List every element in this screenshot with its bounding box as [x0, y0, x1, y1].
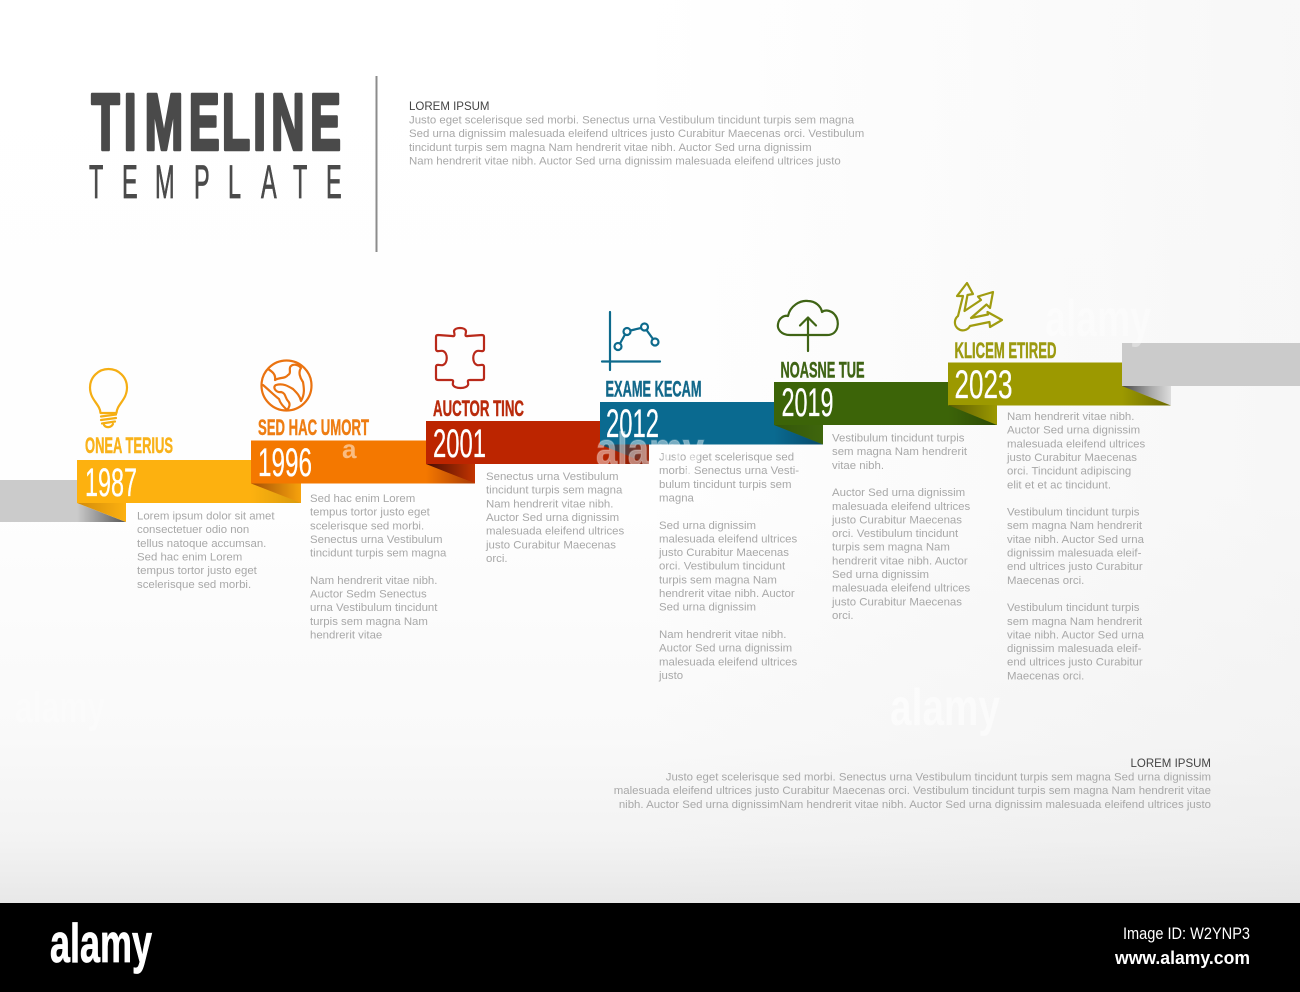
year: 2023: 2023	[954, 363, 1012, 407]
description 2001: Auctor Sed urna dignissim	[486, 512, 619, 524]
description 2001: Senectus urna Vestibulum	[486, 471, 619, 483]
description 2001: malesuada eleifend ultrices	[486, 526, 625, 538]
description 1987: tellus natoque accumsan.	[137, 538, 266, 550]
description 2019: justo Curabitur Maecenas	[831, 514, 962, 526]
description 1996: Sed hac enim Lorem	[310, 493, 415, 505]
description 2019: orci. Vestibulum tincidunt	[832, 528, 959, 540]
description 1996: scelerisque sed morbi.	[310, 520, 424, 532]
description 1996: hendrerit vitae	[310, 630, 382, 642]
description 2012: magna	[659, 492, 695, 504]
icon: light bulb	[90, 369, 127, 427]
description 1996: Senectus urna Vestibulum	[310, 534, 443, 546]
description 1996: Nam hendrerit vitae nibh.	[310, 575, 437, 587]
description 1996: urna Vestibulum tincidunt	[310, 602, 438, 614]
description 2019: Auctor Sed urna dignissim	[832, 487, 965, 499]
milestone 1987	[85, 369, 275, 591]
description 2023: sem magna Nam hendrerit	[1007, 616, 1143, 628]
icon: diverging arrows	[955, 283, 1002, 330]
year: 1996: 1996	[258, 441, 312, 485]
heading: NOASNE TUE: NOASNE TUE	[780, 358, 864, 382]
description 2012: bulum tincidunt turpis sem	[659, 479, 792, 491]
description 2012: justo	[658, 670, 683, 682]
year: 2012: 2012	[606, 402, 659, 446]
intro text block: Justo eget scelerisque sed morbi. Senectus urna Vestibulum tincidunt turpis sem magna	[409, 114, 855, 126]
year: 2001: 2001	[433, 422, 486, 466]
footer text block: Justo eget scelerisque sed morbi. Senectus urna Vestibulum tincidunt turpis sem magna Sed urna dignissim	[666, 772, 1211, 784]
heading: KLICEM ETIRED: KLICEM ETIRED	[954, 338, 1056, 363]
description 2023: dignissim malesuada eleif-	[1007, 643, 1142, 655]
description 2012: Justo eget scelerisque sed	[659, 452, 794, 464]
description 2012: malesuada eleifend ultrices	[659, 656, 798, 668]
intro text block: Sed urna dignissim malesuada eleifend ultrices justo Curabitur Maecenas orci. Vestibulum	[409, 128, 864, 140]
milestone 1996	[258, 360, 447, 642]
description 2012: orci. Vestibulum tincidunt	[659, 561, 786, 573]
description 2019: Vestibulum tincidunt turpis	[832, 432, 965, 444]
watermarks: alamy	[596, 423, 704, 475]
heading: ONEA TERIUS: ONEA TERIUS	[85, 433, 173, 458]
icon: cloud upload	[778, 301, 838, 351]
title line: TEMPLATE: TEMPLATE	[89, 155, 342, 208]
year: 2019: 2019	[782, 381, 834, 425]
description 2019: malesuada eleifend ultrices	[832, 583, 971, 595]
heading: AUCTOR TINC: AUCTOR TINC	[433, 396, 524, 421]
description 2012: Nam hendrerit vitae nibh.	[659, 629, 786, 641]
description 2001: tincidunt turpis sem magna	[486, 485, 623, 497]
watermarks: alamy	[1045, 290, 1151, 348]
image id: Image ID: W2YNP3	[1123, 924, 1250, 943]
ribbon: grey end	[1122, 343, 1300, 406]
site url: www.alamy.com	[1114, 948, 1250, 968]
description 1996: turpis sem magna Nam	[310, 616, 428, 628]
description 2023: Nam hendrerit vitae nibh.	[1007, 411, 1134, 423]
intro text block: LOREM IPSUM	[409, 101, 490, 113]
description 2001: Nam hendrerit vitae nibh.	[486, 498, 613, 510]
icon: globe	[262, 360, 312, 410]
vertical divider	[376, 76, 378, 252]
description 2012: justo Curabitur Maecenas	[658, 547, 789, 559]
logo: alamy: alamy	[50, 912, 152, 974]
description 2023: orci. Tincidunt adipiscing	[1007, 466, 1131, 478]
description 2023: end ultrices justo Curabitur	[1007, 657, 1143, 669]
description 2019: vitae nibh.	[832, 460, 884, 472]
description 2019: turpis sem magna Nam	[832, 542, 950, 554]
ribbon: 2023 olive	[948, 362, 1171, 425]
ribbon: grey start	[0, 480, 126, 522]
footer text block: malesuada eleifend ultrices justo Curabitur Maecenas orci. Vestibulum tincidunt turpis sem magna Nam hendrerit vitae	[614, 785, 1211, 797]
description 1987: Lorem ipsum dolor sit amet	[137, 510, 275, 522]
description 2012: Auctor Sed urna dignissim	[659, 643, 792, 655]
intro text block: tincidunt turpis sem magna Nam hendrerit vitae nibh. Auctor Sed urna dignissim	[409, 142, 812, 154]
description 1987: consectetuer odio non	[137, 524, 249, 536]
description 2019: justo Curabitur Maecenas	[831, 596, 962, 608]
milestone 2023	[954, 283, 1146, 682]
description 2019: malesuada eleifend ultrices	[832, 501, 971, 513]
footer text block: LOREM IPSUM	[1130, 758, 1211, 770]
heading: SED HAC UMORT: SED HAC UMORT	[258, 415, 369, 440]
milestone 2019	[778, 301, 971, 622]
heading: EXAME KECAM: EXAME KECAM	[606, 376, 702, 402]
description 2023: sem magna Nam hendrerit	[1007, 520, 1143, 532]
intro text block	[409, 101, 864, 167]
milestone 2001	[433, 328, 625, 565]
year: 1987: 1987	[85, 461, 137, 505]
description 2012: Sed urna dignissim	[659, 520, 756, 532]
description 2001: orci.	[486, 553, 508, 565]
title	[89, 77, 342, 208]
description 2019: hendrerit vitae nibh. Auctor	[832, 555, 968, 567]
description 1987: Sed hac enim Lorem	[137, 551, 242, 563]
description 2023: Maecenas orci.	[1007, 575, 1084, 587]
watermarks: alamy	[890, 679, 1000, 737]
watermarks: a	[342, 434, 357, 464]
intro text block: Nam hendrerit vitae nibh. Auctor Sed urna dignissim malesuada eleifend ultrices justo	[409, 155, 841, 167]
title line: TIMELINE: TIMELINE	[91, 77, 341, 167]
icon: line chart	[602, 312, 660, 370]
milestone 2012	[602, 312, 799, 682]
footer text block: nibh. Auctor Sed urna dignissimNam hendrerit vitae nibh. Auctor Sed urna dignissim malesuada eleifend ultrices justo	[619, 799, 1211, 811]
description 2023: dignissim malesuada eleif-	[1007, 548, 1142, 560]
description 2023: justo Curabitur Maecenas	[1006, 452, 1137, 464]
description 2023: Vestibulum tincidunt turpis	[1007, 507, 1140, 519]
description 2012: morbi. Senectus urna Vesti-	[659, 465, 799, 477]
watermarks	[15, 290, 1151, 737]
description 2012: turpis sem magna Nam	[659, 574, 777, 586]
description 2001: justo Curabitur Maecenas	[485, 539, 616, 551]
description 2023: end ultrices justo Curabitur	[1007, 561, 1143, 573]
description 2012: hendrerit vitae nibh. Auctor	[659, 588, 795, 600]
ribbon: 1987 yellow	[77, 460, 301, 522]
description 1987: scelerisque sed morbi.	[137, 579, 251, 591]
description 2019: Sed urna dignissim	[832, 569, 929, 581]
ribbon: 2001 red	[426, 421, 649, 484]
ribbon: 2012 blue	[600, 402, 823, 464]
watermarks: alamy	[15, 683, 105, 732]
description 2023: vitae nibh. Auctor Sed urna	[1007, 534, 1145, 546]
description 2019: orci.	[832, 610, 854, 622]
description 1996: Auctor Sedm Senectus	[310, 589, 427, 601]
black footer band	[0, 903, 1300, 992]
icon: puzzle piece	[436, 328, 484, 388]
ribbon: 2019 green	[774, 382, 997, 444]
description 2023: vitae nibh. Auctor Sed urna	[1007, 629, 1145, 641]
description 2023: malesuada eleifend ultrices	[1007, 438, 1146, 450]
footer text block	[614, 758, 1211, 811]
description 1996: tincidunt turpis sem magna	[310, 548, 447, 560]
description 2023: Auctor Sed urna dignissim	[1007, 425, 1140, 437]
description 1996: tempus tortor justo eget	[310, 507, 431, 519]
description 2019: sem magna Nam hendrerit	[832, 446, 968, 458]
description 2023: Vestibulum tincidunt turpis	[1007, 602, 1140, 614]
description 1987: tempus tortor justo eget	[137, 565, 258, 577]
description 2012: Sed urna dignissim	[659, 602, 756, 614]
ribbon: 1996 orange	[251, 440, 475, 503]
description 2023: Maecenas orci.	[1007, 670, 1084, 682]
description 2023: elit et et ac tincidunt.	[1007, 479, 1111, 491]
description 2012: malesuada eleifend ultrices	[659, 533, 798, 545]
